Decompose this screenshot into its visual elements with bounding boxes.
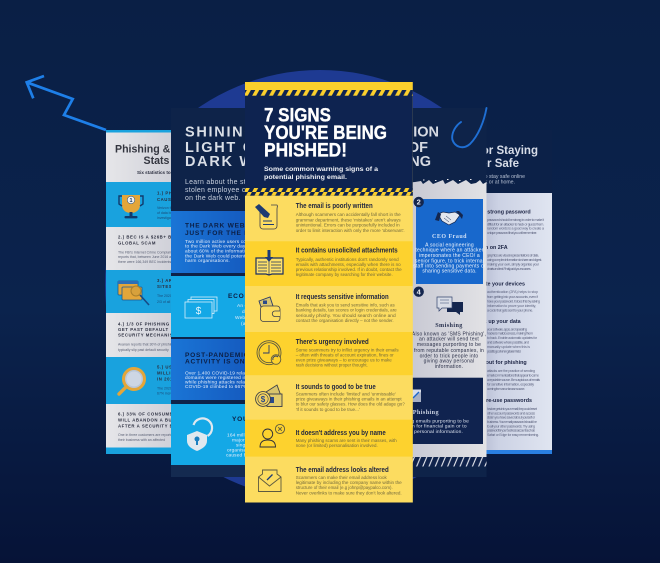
tip: back up data: your software, apps, and operating: [487, 327, 527, 331]
tip: update devices: from getting into your accounts, even if: [487, 295, 538, 299]
section: economy: An e: [237, 303, 248, 309]
tip: re-use passwords: Don't re-use passwords: [471, 398, 532, 404]
tip: back up data: Back up your data: [474, 319, 522, 325]
tips title: Cyber Safe: [459, 158, 519, 170]
arrow: [27, 76, 106, 130]
statistic 1: Verizon found: [157, 206, 178, 210]
tip: look out for phishing: for sensitive information, especially: [487, 382, 534, 386]
tip: look out for phishing: attacks are the practice of sending: [487, 369, 535, 373]
row: address by name: Many phishing scams are sent in their masses, with: [296, 438, 397, 444]
statistic 2: GLOBAL SCAM: [118, 241, 156, 246]
tip: strong password: unique password that you will remember.: [487, 231, 537, 235]
tips intro: at work or at home.: [471, 180, 515, 186]
tip: 2FA: using complex information to share and digest.: [487, 258, 542, 262]
section: economy: (a: [241, 321, 246, 327]
statistic 2: 2.) BEC IS A $26B+ BILLION: [118, 235, 189, 240]
card: CEO fraud: A social engineering: [425, 242, 474, 248]
icon: chat bubbles: [437, 297, 463, 315]
tip: re-use passwords: to all your other passwords. Try using: [487, 424, 535, 428]
row: sensitive information: It requests sensitive information: [296, 292, 389, 301]
row: address by name: [245, 420, 413, 457]
torn edge flecks: [423, 179, 472, 181]
section: not just for the few: THE DARK WEB IS NOT: [185, 222, 274, 230]
section: post-pandemic: COVID-19 climbed to 667% in: [185, 384, 253, 390]
statistic 6: AFTER A SECURITY BREACH: [118, 424, 191, 428]
card: whaling phishing: Phishing: [413, 409, 439, 416]
row: sensitive information: [245, 286, 413, 332]
tip: back up data: possible good when get a reminder.: [487, 349, 522, 353]
statistic 3: [157, 278, 176, 304]
card: whaling phishing: sending emails purporting to be: [396, 418, 469, 424]
tip: back up data: hackers maliciousness, making them: [487, 332, 533, 336]
statistic 4: 4.) 1/3 OF PHISHING EMAILS: [118, 322, 191, 326]
tip: update devices: Update your devices: [472, 282, 525, 288]
row: too good to be true: It sounds to good to be true: [296, 382, 376, 391]
icon: browser and magnifier: [118, 281, 149, 305]
hazard stripes bottom: [245, 188, 413, 196]
icon: bank notes: $: [196, 306, 202, 317]
row: urgency: [245, 332, 413, 375]
card: CEO fraud: staff into sending payments or: [413, 263, 486, 269]
main title: [264, 104, 387, 162]
statistic 1: of data breaches: [157, 211, 183, 215]
row: unsolicited attachments: previous relationship involved. If in doubt, contact the: [296, 267, 402, 273]
panel: phishing statistics: Six statistics to: [137, 170, 171, 175]
tip: 2FA: graphics are visual representations of data.: [487, 254, 539, 258]
row: address by name: It doesn't address you by name: [296, 428, 386, 437]
icon: scroll and pencil: [255, 204, 277, 229]
statistic 2: there were 166,349 BEC incidents: [118, 260, 171, 264]
section: you: YOU: [232, 416, 249, 423]
section: not just for the few: [185, 222, 274, 264]
section: post-pandemic: POST-PANDEMIC: [185, 352, 249, 359]
tips intro: to stay safe online: [483, 174, 525, 180]
statistic 4: SECURITY MECHANISMS: [118, 333, 181, 338]
panel: 7 signs you're being phished: [245, 82, 413, 502]
section: you: caused by: [226, 452, 250, 458]
statistic 5: IN 2019: [157, 376, 176, 382]
tip: 2FA: [477, 245, 542, 271]
card: CEO fraud: technique where an attacker: [415, 248, 484, 254]
icon: handshake: [435, 211, 463, 225]
icon: envelope fragment: [405, 390, 421, 402]
section: you: single: [236, 442, 250, 448]
row: sensitive information: banking details, tax scores or login credentials, are: [296, 308, 397, 314]
row: unsolicited attachments: legitimate company by searching for their website.: [296, 272, 393, 278]
tip: look out for phishing: Look out for phishing: [471, 360, 527, 366]
dark panel title: OF: [408, 140, 428, 156]
statistic 4: typically slip past default security: [118, 348, 169, 352]
badge: number 2: 2: [417, 198, 421, 207]
tips intro: [471, 174, 525, 186]
tip: re-use passwords: stolen you have saved about yourself or: [487, 416, 536, 420]
section: economy: [228, 293, 267, 327]
row: sensitive information: seriously phishy. You should search online and: [296, 313, 396, 319]
row: poorly written: unintentional. Errors can be purposefully included in: [296, 223, 400, 229]
row: address altered: legitimate by including the company name within the: [296, 480, 402, 486]
row: unsolicited attachments: emails with attachments, especially when there is no: [296, 262, 401, 268]
tip: re-use passwords: hacker gets into your email, they could reset: [487, 407, 537, 411]
tip: re-use passwords: password for your business account such as: [487, 429, 535, 433]
tips title: [451, 145, 538, 170]
background circle: [105, 70, 535, 500]
icon: clock: [257, 341, 281, 365]
section: not just for the few: harm organisations.: [185, 258, 230, 264]
dark web intro: on the dark web.: [185, 195, 241, 202]
tip: 2FA: Turn on 2FA: [477, 245, 508, 251]
smishing text: messages purporting to be: [417, 342, 481, 348]
row: address altered: Never overlinks to make sure they don't look altered.: [296, 490, 402, 496]
tip: 2FA: charts and text. Finally, add your sources.: [487, 267, 531, 271]
icon: trophy: [119, 195, 143, 218]
icon: magnifying glass: [119, 368, 144, 394]
section: you: 164 million: [227, 432, 252, 438]
tip: look out for phishing: a reputable source. Be suspicious of emails: [487, 378, 540, 382]
tip: update devices: a code that gets sent to your phone.: [487, 308, 533, 312]
card: CEO fraud: impersonates the CEO/ a: [419, 253, 480, 259]
tip: back up data: manually update when this is: [487, 345, 530, 349]
row: unsolicited attachments: Typically, authentic institutions don't randomly send: [296, 257, 399, 263]
tips title: Tips for Staying: [451, 145, 538, 157]
section: you: organisation: [227, 448, 255, 454]
row: urgency: – often with threats of account expiration, fines or: [296, 352, 394, 358]
icon: wallet: [259, 297, 280, 322]
dark web intro: Learn about the state of: [185, 179, 265, 186]
icon: envelope with pencil: [258, 470, 281, 492]
statistic 5: [157, 364, 179, 396]
icon: fish hook: [452, 108, 486, 147]
main title: PHISHED!: [264, 140, 347, 162]
statistic 6: [118, 412, 191, 442]
row: too good to be true: to blur our safety glasses. How does the old adage go?: [296, 402, 405, 408]
statistic 4: GET PAST DEFAULT: [118, 327, 169, 332]
row: too good to be true: prize giveaways in their phishing emails in an attempt: [296, 397, 402, 403]
dark web title: DARK WEB: [185, 154, 278, 170]
tip: update devices: information to prove your identity,: [487, 304, 536, 308]
row: address altered: Scammers can make their email address look: [296, 475, 387, 481]
statistic 4: Avanan reports that 30% of phishing: [118, 342, 174, 346]
icon: person with cross: [260, 424, 285, 447]
subtitle: [264, 166, 378, 181]
section: not just for the few: JUST FOR THE FEW: [185, 230, 261, 237]
row: urgency: rash decisions without proper thought.: [296, 363, 368, 369]
icon: bank notes: [185, 297, 217, 318]
row: urgency: even prize giveaways – to encourage us to make: [296, 357, 392, 363]
badge: number 2: [414, 197, 424, 207]
smishing text: Also known as 'SMS Phishing',: [412, 331, 486, 337]
section: you: [226, 416, 255, 458]
card: CEO fraud: [413, 199, 486, 284]
row: poorly written: grammar department, these 'mistakes' aren't always: [296, 217, 401, 223]
statistic 3: The 2020: [157, 294, 172, 298]
row: too good to be true: 'If it sounds to good to be true...': [296, 407, 360, 413]
statistic 2: reports that, between June 2016 and: [118, 255, 175, 259]
card: whaling phishing: [396, 378, 483, 444]
section: not just for the few: the Dark Web could potentially: [185, 253, 255, 259]
statistic 1: 1.) PHISHING: [157, 190, 191, 196]
tip: update devices: [472, 282, 540, 312]
smishing text: an attacker will send text: [419, 337, 479, 343]
tip: look out for phishing: coming from an unknown source.: [487, 387, 525, 391]
statistic 1: [157, 190, 191, 220]
diagonal stripes footer: [405, 457, 486, 466]
row: poorly written: order to limit interaction with only the more 'observant'.: [296, 228, 405, 234]
statistic 6: 6.) 33% OF CONSUMERS: [118, 412, 180, 416]
row: too good to be true: [245, 375, 413, 420]
main title: YOU'RE BEING: [264, 122, 387, 144]
row: poorly written: The email is poorly written: [296, 201, 373, 210]
row: sensitive information: Emails that ask you to send sensitive info, such as: [296, 303, 395, 309]
panel: staying safe tips: [451, 130, 552, 454]
dark panel title: ION: [413, 125, 439, 141]
tip: back up data: and software where possible, and: [487, 341, 529, 345]
smishing text: order to trick people into: [420, 353, 478, 359]
main title: 7 SIGNS: [264, 104, 331, 126]
section: not just for the few: Two million active users connect: [185, 239, 259, 245]
section: post-pandemic: while phishing attacks related: [185, 379, 252, 385]
statistic 5: The 2020: [157, 386, 172, 390]
statistic 6: WILL ABANDON A BUSINESS: [118, 418, 191, 422]
badge: number 4: 4: [417, 287, 422, 296]
statistic 2: The FBI's Internet Crime Complaint: [118, 250, 173, 254]
row: urgency: There's urgency involved: [296, 337, 369, 346]
subtitle: potential phishing email.: [264, 174, 347, 181]
dark web intro: stolen employee credentials: [185, 187, 279, 194]
smishing text: Smishing: [435, 322, 463, 329]
tip: re-use passwords: Safari or Edge for easy remembering.: [487, 433, 539, 437]
statistic 1: investigated: [157, 216, 176, 220]
statistic 3: SITES: [157, 284, 172, 289]
statistic 5: 67% increase: [157, 392, 178, 396]
tip: strong password: [471, 210, 544, 235]
card: CEO fraud: sharing sensitive data.: [422, 269, 477, 275]
dark web title: [185, 125, 278, 170]
statistic 5: 5.) USE: [157, 364, 176, 370]
dark panel title: [408, 125, 439, 170]
statistic 2: [118, 235, 189, 264]
smishing text: from reputable companies, in: [414, 348, 484, 354]
icon: coin and bank notes: [256, 385, 282, 406]
section: post-pandemic: domains were registered in Q1: [185, 375, 255, 381]
smishing text: [412, 322, 486, 370]
card: CEO fraud: senior figure, to trick internal: [415, 258, 484, 264]
tip: 2FA: making your own, simply organise your: [487, 263, 540, 267]
statistic 6: their business with an affected: [118, 438, 165, 442]
section: economy: d: [242, 309, 245, 315]
icon: coin and bank notes: $: [261, 395, 266, 404]
row: urgency: Some scammers try to inflict urgency in their emails: [296, 348, 399, 354]
row: address altered: [245, 457, 413, 502]
tip: strong password: random words is a good way to create a: [487, 227, 544, 231]
panel: phishing statistics: Stats: [144, 155, 170, 167]
smishing text: information.: [435, 364, 463, 370]
card: whaling phishing: reveal personal information.: [398, 429, 463, 435]
tip: re-use passwords: business. Your email password should be: [487, 420, 537, 424]
smishing text: giving away personal: [424, 359, 474, 365]
tip: re-use passwords: [471, 398, 539, 437]
panel: phishing statistics: [106, 130, 196, 454]
section: you: major d: [232, 438, 249, 444]
card: whaling phishing: often for financial gain or to: [403, 424, 467, 430]
statistic 4: [118, 322, 191, 352]
dark web title: LIGHT ON: [185, 140, 268, 156]
section: not just for the few: about 60% of the information on: [185, 248, 258, 254]
tip: strong password: difficult for an attacker to hack or guess them.: [487, 222, 544, 226]
tip: strong password: Use a strong password: [471, 210, 531, 216]
dark web title: SHINING: [185, 125, 257, 141]
section: post-pandemic: ACTIVITY IS ON THE: [185, 358, 263, 366]
statistic 3: 2/3 of all: [157, 300, 170, 304]
icon: book: [256, 250, 283, 275]
icon: trophy: 1: [129, 198, 133, 204]
statistic 5: MILLION: [157, 370, 179, 376]
tip: back up data: [474, 319, 538, 353]
dark web intro: [185, 179, 279, 202]
tip: re-use passwords: other account passwords and access: [487, 411, 535, 415]
panel: types of phishing: [396, 108, 486, 477]
tip: look out for phishing: [471, 360, 540, 391]
section: economy: Web: [235, 315, 245, 321]
statistic 1: CAUSES: [157, 197, 178, 202]
row: poorly written: Although scammers can accidentally fall short in the: [296, 212, 401, 218]
icon: shield with open lock: [187, 418, 212, 451]
panel: dark web: [171, 108, 279, 477]
badge: number 4: [414, 286, 424, 297]
row: too good to be true: Scammers often include 'limited' and 'unmissable': [296, 392, 396, 398]
tip: strong password: password should be strong in order to make it: [487, 218, 544, 222]
row: address altered: structure of their email (e.g johnp@paypalco.com).: [296, 485, 393, 491]
tip: update devices: authentication (2FA) helps to stop: [487, 290, 538, 294]
row: address altered: The email address looks altered: [296, 465, 389, 474]
row: address by name: none (or limited) personalisation involved.: [296, 443, 378, 449]
row: poorly written: [245, 196, 413, 241]
statistic 6: One in three customers are reported: [118, 433, 174, 437]
row: sensitive information: contact the organisation directly – not the sender.: [296, 318, 394, 324]
hazard stripes top: [245, 90, 413, 96]
statistics title: Phishing & Data: [115, 144, 196, 156]
tip: update devices: have your password. It does this by asking: [487, 299, 540, 303]
dark panel title: NG: [409, 154, 431, 170]
tip: look out for phishing: email communications that appear to come: [487, 374, 539, 378]
section: post-pandemic: Over 1,400 COVID-19 related: [185, 370, 252, 376]
card: CEO fraud: CEO Fraud: [432, 234, 467, 240]
section: post-pandemic: [185, 352, 263, 390]
section: not just for the few: to the Dark Web every day and: [185, 244, 256, 250]
subtitle: Some common warning signs of a: [264, 166, 378, 173]
section: economy: ECONOMY: [228, 293, 267, 300]
row: unsolicited attachments: It contains unsolicited attachments: [296, 246, 398, 254]
tip: back up data: to hack. Enable automatic updates for: [487, 336, 538, 340]
statistic 3: 3.) ARE: [157, 278, 176, 283]
row: unsolicited attachments: [245, 241, 413, 286]
